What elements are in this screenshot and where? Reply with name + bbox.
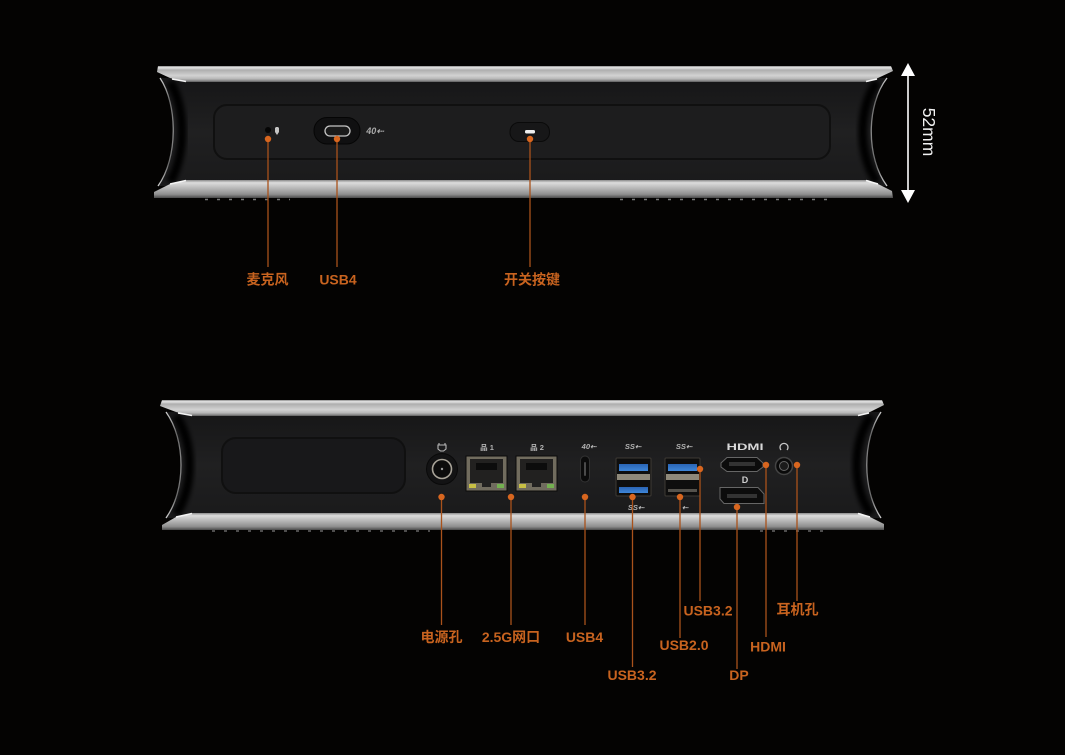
USB3.2 and USB2.0 stack: ⇠: [682, 503, 689, 512]
callout: USB4 rear: [566, 494, 603, 645]
callout: USB3.2 upper: USB3.2: [683, 602, 733, 618]
callout: HDMI: HDMI: [750, 638, 786, 654]
DP port: [720, 475, 764, 504]
callout: DP: DP: [729, 667, 749, 683]
USB3.2 stack: [616, 442, 651, 512]
dimension arrow: 52mm: 52mm: [919, 108, 939, 156]
callout: USB4 front: [319, 136, 357, 288]
ethernet port 2: 品 2: [530, 443, 544, 452]
panel: front view device: [154, 66, 893, 200]
callout: HDMI: [750, 462, 786, 654]
ethernet port 2: [516, 443, 557, 491]
USB3.2 stack: SS⇠: [628, 503, 645, 512]
headphone jack: [776, 443, 792, 474]
front recessed panel: [214, 105, 830, 159]
rear recessed panel: [222, 438, 405, 493]
callout: USB3.2 upper: [683, 466, 733, 618]
callout: USB2.0: USB2.0: [659, 637, 709, 653]
callout: DP: [729, 504, 749, 683]
power button: [510, 122, 550, 142]
USB3.2 and USB2.0 stack: [665, 442, 700, 512]
USB4 rear port: [580, 442, 597, 482]
callout: 电源孔: 电源孔: [420, 629, 462, 645]
USB3.2 stack: SS⇠: [625, 442, 642, 451]
panel: rear view device: [160, 400, 884, 531]
ethernet port 1: [466, 443, 507, 491]
callout: 开关按键: [504, 136, 560, 288]
callout: 2.5G网口: [482, 494, 540, 645]
callout: USB3.2 lower: [607, 494, 657, 683]
callout: 耳机孔: 耳机孔: [776, 602, 818, 618]
callout: USB4 rear: USB4: [566, 629, 603, 645]
callout: 电源孔: [420, 494, 462, 645]
power jack: [426, 443, 458, 484]
USB4 rear port: 40⇠: [581, 442, 597, 451]
callout: USB4 front: USB4: [319, 272, 357, 288]
callout: 麦克风: [246, 136, 288, 288]
USB3.2 and USB2.0 stack: SS⇠: [676, 442, 693, 451]
HDMI port: HDMI: [726, 442, 764, 453]
callout: 开关按键: 开关按键: [504, 272, 560, 288]
DP port: D: [742, 475, 749, 485]
callout: 耳机孔: [776, 462, 818, 618]
dimension arrow: 52mm: [901, 63, 939, 203]
microphone hole and icon: [265, 127, 279, 135]
callout: 2.5G网口: 2.5G网口: [482, 629, 540, 645]
USB4 port: [314, 118, 385, 144]
USB4 port: 40⇠: [365, 126, 385, 136]
callout: 麦克风: 麦克风: [246, 272, 288, 288]
ethernet port 1: 品 1: [480, 443, 494, 452]
HDMI port: [721, 442, 764, 472]
callout: USB3.2 lower: USB3.2: [607, 667, 657, 683]
callout: USB2.0: [659, 494, 709, 653]
